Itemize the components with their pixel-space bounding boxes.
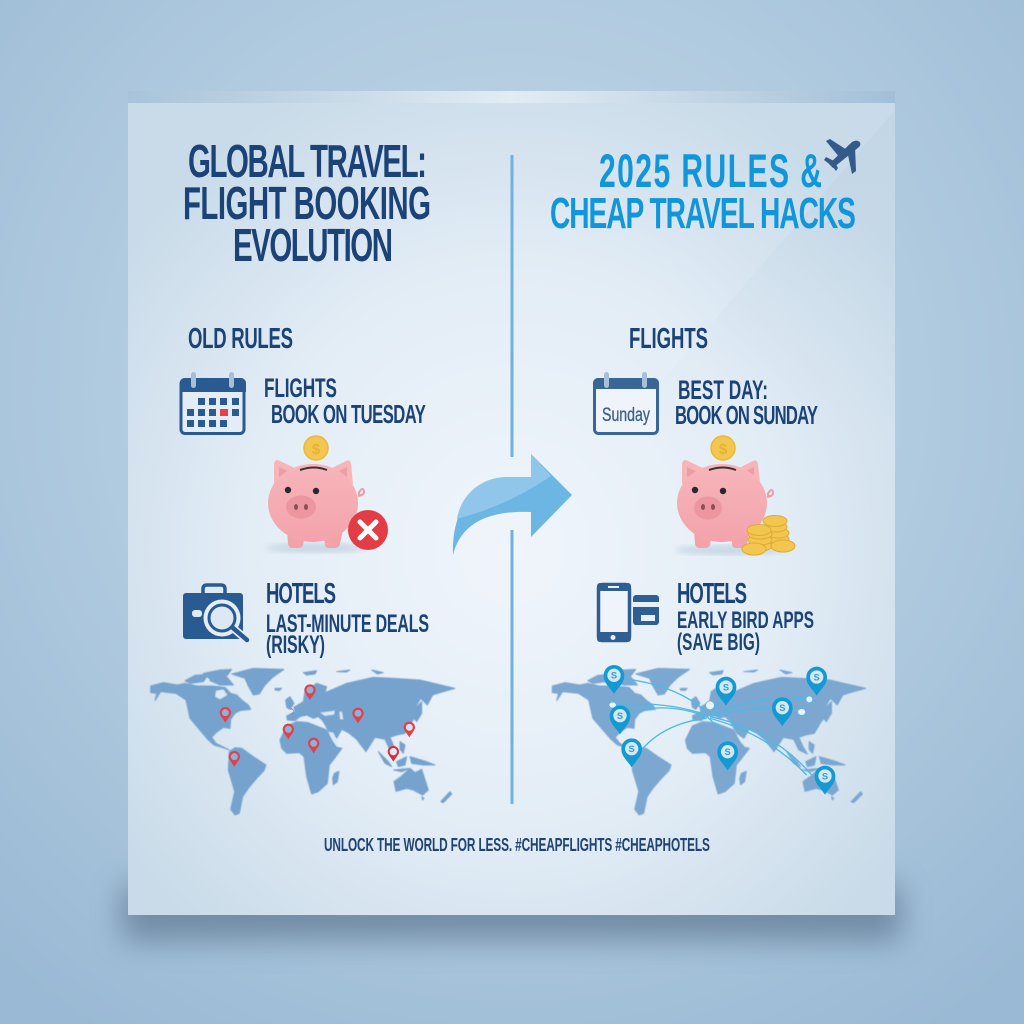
red location pins: [220, 684, 415, 767]
blue location pins: S: [779, 703, 785, 713]
divider line lower: [510, 530, 514, 804]
icon: briefcase with magnifier: [183, 585, 247, 640]
icon: sunday calendar: Sunday: [602, 405, 650, 426]
text: hotels last-minute deals: LAST-MINUTE DEALS: [266, 611, 429, 638]
title: 2025 rules and cheap travel hacks: 2025 RULES &: [599, 145, 822, 198]
glass panel: [128, 91, 895, 915]
title: 2025 rules and cheap travel hacks: [550, 145, 856, 238]
text: hotels last-minute deals: HOTELS: [266, 578, 336, 610]
text: hotels early bird apps: HOTELS: [677, 578, 747, 610]
route nodes: [609, 696, 813, 715]
panel: new rules: [550, 139, 866, 815]
map landmass: [552, 668, 866, 815]
blue location pins: S: [617, 711, 623, 721]
icon: piggy bank with cross: [266, 436, 388, 553]
icon: sunday calendar: [593, 372, 659, 434]
icon: piggy bank with cross: $: [312, 441, 321, 458]
divider line upper: [510, 155, 514, 457]
text: hotels early bird apps: (SAVE BIG): [677, 630, 760, 656]
route lines: [612, 678, 812, 775]
title: EVOLUTION: [233, 221, 393, 272]
text: flights book on tuesday: FLIGHTS: [264, 372, 337, 403]
text: hotels last-minute deals: [266, 578, 429, 659]
heading: flights: FLIGHTS: [629, 323, 708, 355]
panel shadow: [122, 885, 901, 941]
blue location pins: S: [611, 671, 617, 681]
heading: old rules: OLD RULES: [188, 323, 293, 355]
blue location pins: S: [822, 771, 828, 781]
blue location pins: [604, 665, 835, 795]
title: [183, 137, 431, 272]
icon: piggy bank with coins: $: [719, 441, 728, 458]
world map with blue pins and routes: [552, 665, 866, 815]
text: flights book on tuesday: BOOK ON TUESDAY: [271, 399, 426, 429]
text: hotels early bird apps: EARLY BIRD APPS: [677, 608, 814, 634]
icon: piggy bank with coins: [675, 436, 795, 555]
text: hotels early bird apps: [677, 578, 814, 656]
title: GLOBAL TRAVEL:: [188, 137, 427, 188]
blue location pins: S: [723, 682, 729, 692]
text: best day book on sunday: BEST DAY:: [678, 374, 768, 405]
map landmass: [151, 668, 455, 815]
text: best day book on sunday: BOOK ON SUNDAY: [675, 400, 818, 430]
title: 2025 rules and cheap travel hacks: CHEAP TRAVEL HACKS: [550, 189, 856, 238]
arrow: [453, 454, 572, 555]
inland seas: [215, 689, 343, 747]
world map with red pins: [151, 668, 455, 815]
text: flights book on tuesday: [264, 372, 426, 429]
panel: old rules: [151, 137, 455, 815]
icon: calendar: [180, 372, 246, 434]
blue location pins: S: [725, 747, 731, 757]
icon: phone and card: [597, 583, 659, 642]
text: hotels last-minute deals: (RISKY): [266, 632, 325, 659]
footer text: UNLOCK THE WORLD FOR LESS. #CHEAPFLIGHTS #CHEAPHOTELS: [324, 836, 710, 856]
title: FLIGHT BOOKING: [183, 179, 431, 230]
icon: airplane: [824, 139, 860, 174]
blue location pins: S: [814, 672, 820, 682]
blue location pins: S: [629, 744, 635, 754]
text: best day book on sunday: [675, 374, 818, 430]
